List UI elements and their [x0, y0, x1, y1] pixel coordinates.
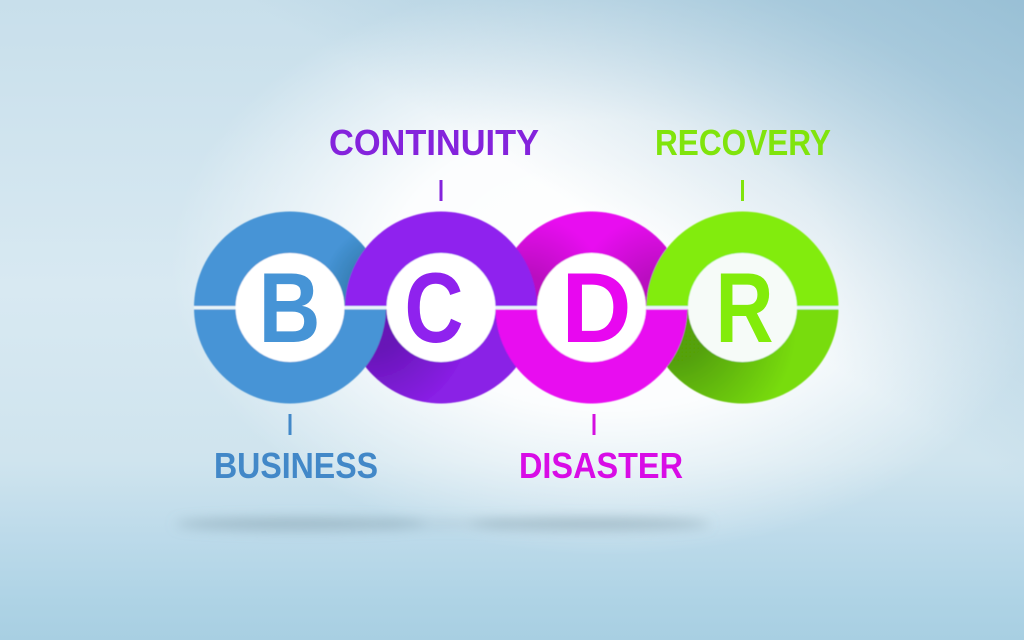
ring divider line	[194, 306, 839, 309]
letter D: D	[562, 252, 632, 363]
white centre: R	[688, 253, 797, 362]
label: recovery: RECOVERY	[655, 122, 831, 163]
tick: continuity	[440, 180, 442, 201]
floor shadow	[175, 518, 710, 530]
label: business: BUSINESS	[214, 445, 378, 486]
letter B: B	[258, 252, 320, 363]
white centre: B	[236, 253, 344, 362]
top half of rings	[193, 210, 840, 307]
tick: recovery	[741, 180, 744, 201]
bottom half of rings	[193, 308, 840, 404]
white centre: C	[386, 253, 496, 362]
tick: disaster	[592, 414, 596, 435]
letter C: C	[404, 252, 464, 363]
tick: business	[288, 414, 292, 435]
label: continuity: CONTINUITY	[329, 122, 539, 163]
letter R: R	[716, 252, 774, 363]
BCDR interlocked rings	[194, 212, 839, 404]
label: disaster: DISASTER	[519, 445, 683, 486]
white centre: D	[537, 253, 646, 362]
